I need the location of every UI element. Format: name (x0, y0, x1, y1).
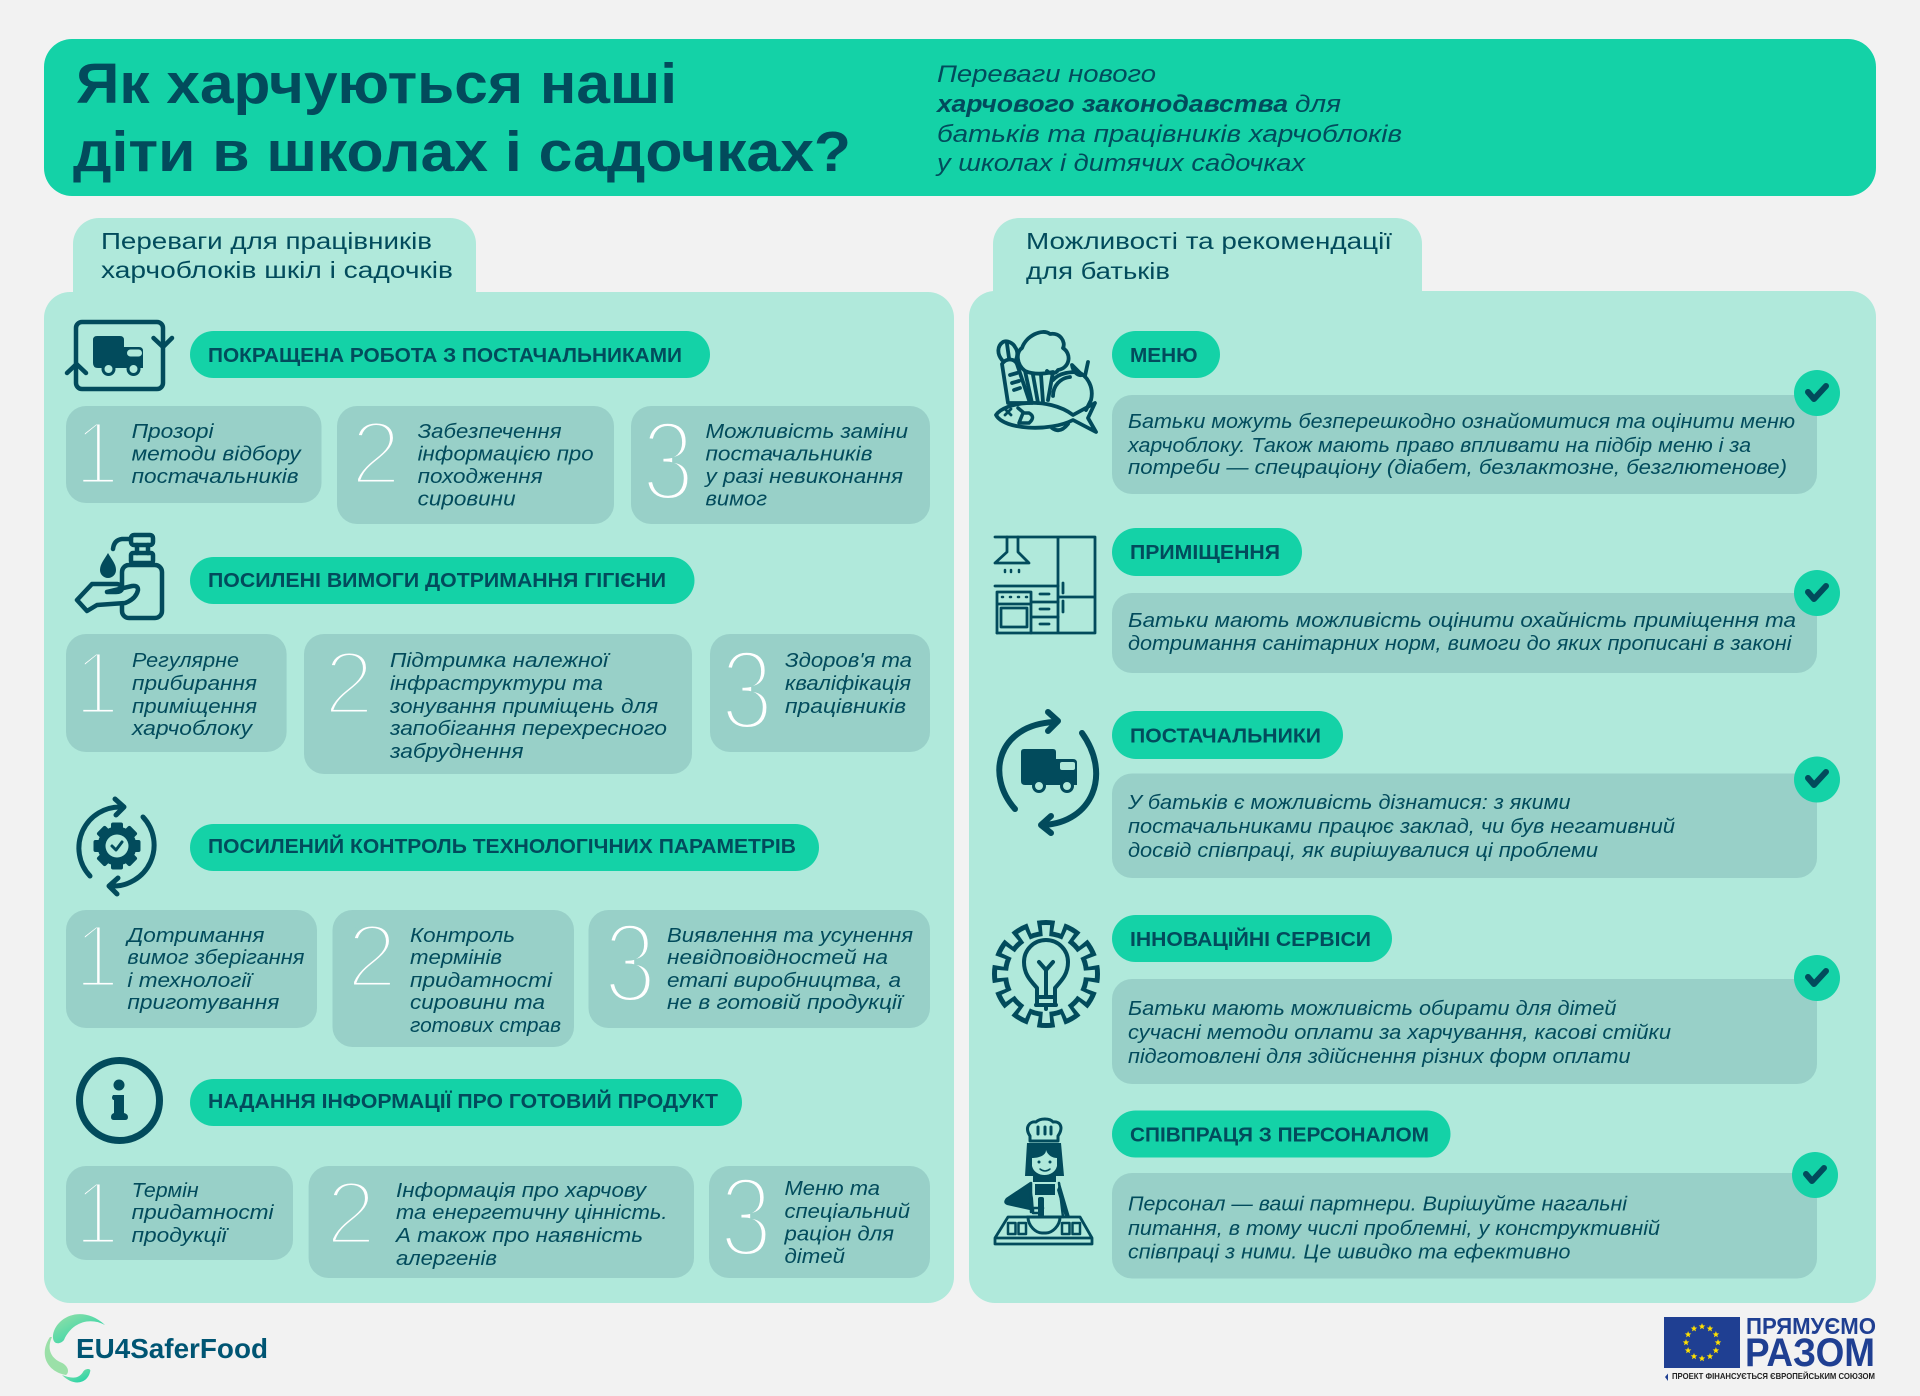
title: діти в школах і садочках? (73, 120, 851, 184)
logo: EU4SaferFood (45, 1314, 268, 1382)
text box: menu: Батьки можуть безперешкодно ознайомитися та оцінити меню (1128, 411, 1795, 433)
subtitle: харчового законодавства (935, 91, 1288, 118)
card 4.2: Інформація про харчову (396, 1180, 647, 1202)
card 3.1: і технології (127, 970, 254, 992)
logo: EU flag and Pryamuyemo Razom (1664, 1313, 1876, 1381)
pill: suppliers: ПОСТАЧАЛЬНИКИ (1130, 726, 1321, 748)
EU flag (1664, 1317, 1740, 1368)
card 1.3: вимог (706, 488, 767, 510)
card 3.2: придатності (410, 970, 553, 992)
card 4.2: алергенів (396, 1248, 497, 1270)
icon: check badge 1 (1794, 370, 1840, 416)
card 2.3: працівників (785, 696, 906, 718)
tab heading: parents (993, 218, 1422, 348)
card 3.2: термінів (410, 947, 502, 969)
icon: food (996, 332, 1096, 432)
icon: check badge 5 (1792, 1152, 1838, 1198)
card 4.1 (66, 1164, 293, 1264)
subtitle: батьків та працівників харчоблоків (937, 121, 1402, 148)
icon: gear with check and arrows (79, 799, 154, 894)
card 1.2 (337, 404, 614, 524)
card 1.1: методи відбору (132, 444, 302, 466)
card 1.2: інформацією про (418, 444, 594, 466)
text box: innovative services: підготовлені для здійснення різних форм оплати (1128, 1046, 1630, 1068)
card 2.2: забруднення (389, 741, 524, 763)
card 3.2: 2 (347, 907, 397, 1007)
pill: menu: МЕНЮ (1130, 345, 1198, 367)
card 3.3: не в готовій продукції (667, 992, 905, 1014)
card 4.3: дітей (784, 1246, 845, 1268)
text box: cooperation with staff: питання, в тому числі проблемні, у конструктивній (1128, 1218, 1660, 1240)
icon: kitchen (995, 537, 1095, 633)
card 1.3: у разі невиконання (703, 466, 903, 488)
pill: product information: НАДАННЯ ІНФОРМАЦІЇ ПРО ГОТОВИЙ ПРОДУКТ (208, 1089, 718, 1113)
pill: premises: ПРИМІЩЕННЯ (1130, 542, 1280, 564)
tab heading: parents: для батьків (1026, 258, 1170, 284)
card 3.1: вимог зберігання (127, 947, 305, 969)
panel: opportunities for parents (969, 218, 1876, 1303)
card 4.1: придатності (132, 1202, 274, 1224)
pill: suppliers: ПОКРАЩЕНА РОБОТА З ПОСТАЧАЛЬНИКАМИ (208, 345, 682, 367)
text box: menu: потреби — спецраціону (діабет, безлактозне, безглютенове) (1128, 457, 1787, 479)
card 2.3: кваліфікація (785, 673, 911, 695)
card 4.2: та енергетичну цінність. (396, 1202, 668, 1224)
text box: cooperation with staff: Персонал — ваші партнери. Вирішуйте нагальні (1128, 1194, 1628, 1216)
card 2.3: 3 (721, 627, 773, 753)
pill: process control (190, 824, 819, 871)
card 3.3: невідповідностей на (667, 947, 888, 969)
pill: hygiene (190, 557, 694, 604)
card 3.2: готових страв (410, 1015, 561, 1037)
card 4.2: А також про наявність (395, 1225, 643, 1247)
card 2.1: приміщення (132, 696, 257, 718)
pill: process control: ПОСИЛЕНИЙ КОНТРОЛЬ ТЕХНОЛОГІЧНИХ ПАРАМЕТРІВ (208, 834, 796, 858)
subtitle: Переваги нового (937, 61, 1156, 88)
subtitle: у школах і дитячих садочках (935, 150, 1306, 177)
text box: innovative services (1112, 979, 1817, 1084)
icon: check badge 4 (1794, 955, 1840, 1001)
text box: cooperation with staff (1112, 1173, 1817, 1278)
card 4.3: раціон для (783, 1224, 894, 1246)
card 1.1: постачальників (132, 466, 299, 488)
icon: chef (995, 1119, 1092, 1244)
icon: truck with circular arrows (999, 712, 1096, 833)
pill: cooperation with staff: СПІВПРАЦЯ З ПЕРСОНАЛОМ (1130, 1124, 1429, 1146)
card 1.1: Прозорі (132, 421, 214, 443)
logo: EU4SaferFood: EU4SaferFood (76, 1333, 268, 1364)
icon: gear with light bulb (993, 921, 1099, 1027)
card 1.2: сировини (418, 488, 516, 510)
card 3.1: Дотримання (125, 925, 265, 947)
tab heading: parents: Можливості та рекомендації (1026, 228, 1393, 254)
header banner (44, 39, 1876, 196)
text box: premises: Батьки мають можливість оцінити охайність приміщення та (1128, 610, 1796, 632)
pill: suppliers (1112, 711, 1343, 759)
text box: innovative services: Батьки мають можливість обирати для дітей (1128, 998, 1616, 1020)
text box: premises (1112, 593, 1817, 673)
card 2.1: 1 (75, 634, 119, 734)
card 1.1: 1 (75, 404, 119, 504)
card 2.3 (710, 627, 930, 753)
card 1.3 (631, 398, 930, 524)
card 2.1: харчоблоку (131, 718, 253, 740)
card 3.2: сировини та (410, 992, 545, 1014)
card 4.1: 1 (75, 1164, 119, 1264)
card 2.1: Регулярне (132, 650, 239, 672)
pill: hygiene: ПОСИЛЕНІ ВИМОГИ ДОТРИМАННЯ ГІГІЄНИ (208, 570, 666, 592)
logo: EU flag and Pryamuyemo Razom: РАЗОМ (1745, 1331, 1875, 1375)
card 4.1: продукції (132, 1225, 229, 1247)
card 2.2: зонування приміщень для (389, 696, 658, 718)
card 4.2 (309, 1164, 694, 1278)
card 1.3: 3 (642, 398, 694, 524)
card 4.3: Меню та (784, 1178, 880, 1200)
card 3.1: приготування (127, 992, 280, 1014)
text box: suppliers: У батьків є можливість дізнатися: з якими (1127, 792, 1570, 814)
card 1.2: походження (418, 466, 543, 488)
icon: check badge 2 (1794, 570, 1840, 616)
card 4.3: спеціальний (784, 1201, 910, 1223)
tab heading: workers: Переваги для працівників (101, 228, 432, 254)
icon: truck in exchange loop (67, 322, 172, 389)
tab heading: workers (73, 218, 476, 348)
icon: information circle (80, 1060, 160, 1140)
card 2.3: Здоров'я та (785, 650, 912, 672)
card 3.2 (332, 907, 574, 1047)
card 2.2: 2 (324, 634, 374, 734)
pill: cooperation with staff (1112, 1110, 1450, 1158)
card 2.2 (304, 634, 692, 774)
card 1.1 (66, 404, 322, 504)
text box: suppliers: постачальниками працює заклад, чи був негативний (1128, 816, 1675, 838)
card 3.1: 1 (75, 907, 119, 1007)
subtitle: для (1295, 91, 1341, 118)
card 3.2: Контроль (410, 925, 515, 947)
text box: suppliers (1112, 774, 1817, 878)
tab heading: workers: харчоблоків шкіл і садочків (101, 257, 453, 283)
text box: cooperation with staff: співпраці з ними. Це швидко та ефективно (1128, 1242, 1570, 1264)
text box: menu: харчоблоку. Також мають право впливати на підбір меню і за (1127, 435, 1751, 457)
logo: EU flag and Pryamuyemo Razom: ПРОЕКТ ФІНАНСУЄТЬСЯ ЄВРОПЕЙСЬКИМ СОЮЗОМ (1672, 1370, 1875, 1381)
text box: innovative services: сучасні методи оплати за харчування, касові стійки (1128, 1022, 1671, 1044)
pill: innovative services: ІННОВАЦІЙНІ СЕРВІСИ (1130, 927, 1371, 951)
card 4.3: 3 (720, 1154, 772, 1280)
text box: premises: дотримання санітарних норм, вимоги до яких прописані в законі (1128, 633, 1792, 655)
card 3.1 (66, 907, 317, 1028)
icon: soap and hand (77, 535, 162, 618)
card 4.1: Термін (132, 1180, 199, 1202)
card 3.3 (588, 900, 930, 1028)
card 1.2: Забезпечення (418, 421, 562, 443)
card 2.1 (66, 634, 287, 752)
title (73, 52, 851, 184)
card 4.3 (709, 1154, 930, 1280)
card 3.3: Виявлення та усунення (667, 925, 913, 947)
panel: benefits for kitchen workers (44, 218, 954, 1303)
pill: menu (1112, 331, 1220, 378)
card 2.2: Підтримка належної (390, 650, 611, 672)
card 3.3: 3 (604, 900, 656, 1026)
subtitle (935, 61, 1402, 177)
icon: check badge 3 (1794, 756, 1840, 802)
pill: premises (1112, 528, 1302, 576)
logo: EU flag and Pryamuyemo Razom: ПРЯМУЄМО (1746, 1313, 1876, 1339)
pill: suppliers (190, 331, 710, 378)
card 2.1: прибирання (132, 673, 257, 695)
card 2.2: інфраструктури та (390, 673, 603, 695)
card 4.2: 2 (326, 1164, 376, 1264)
title: Як харчуються наші (76, 52, 677, 116)
card 1.2: 2 (351, 404, 401, 504)
card 2.2: запобігання перехресного (389, 718, 667, 740)
card 1.3: постачальників (706, 444, 872, 466)
card 1.3: Можливість заміни (706, 421, 908, 443)
pill: product information (190, 1079, 742, 1126)
text box: suppliers: досвід співпраці, як вирішувалися ці проблеми (1128, 840, 1598, 862)
text box: menu (1112, 395, 1817, 494)
pill: innovative services (1112, 915, 1392, 962)
card 3.3: етапі виробництва, а (667, 970, 901, 992)
